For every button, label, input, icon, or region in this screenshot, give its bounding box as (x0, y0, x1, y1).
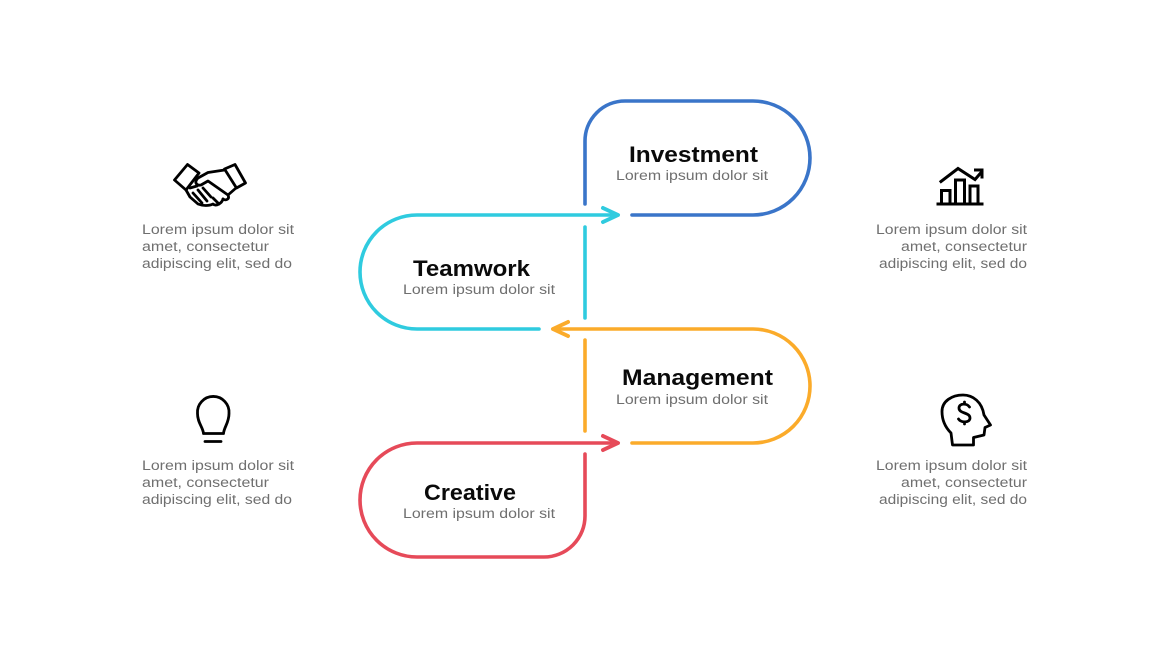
creative outline (360, 443, 617, 557)
creative heading: Creative (424, 480, 516, 505)
icon: head with dollar sign (942, 395, 990, 445)
icon: handshake (174, 164, 246, 206)
text block: bottom left: Lorem ipsum dolor sit (142, 458, 294, 473)
text block: bottom left (142, 458, 294, 507)
icon: light bulb (197, 396, 229, 442)
management heading: Management (622, 365, 774, 390)
investment subtitle: Lorem ipsum dolor sit (616, 168, 768, 183)
management subtitle: Lorem ipsum dolor sit (616, 392, 768, 407)
text block: bottom right: amet, consectetur (901, 475, 1028, 490)
text block: bottom right (876, 458, 1028, 507)
management arrow head (553, 322, 568, 336)
text block: bottom left: amet, consectetur (142, 475, 270, 490)
text block: top right: adipiscing elit, sed do (879, 256, 1027, 271)
teamwork arrow head (603, 208, 618, 222)
panel: investment loop (585, 101, 810, 215)
text block: top left (142, 222, 294, 271)
text block: top right: amet, consectetur (901, 239, 1028, 254)
text block: top right: Lorem ipsum dolor sit (876, 222, 1027, 237)
creative subtitle: Lorem ipsum dolor sit (403, 506, 555, 521)
text block: bottom right: Lorem ipsum dolor sit (876, 458, 1027, 473)
teamwork subtitle: Lorem ipsum dolor sit (403, 282, 555, 297)
text block: bottom left: adipiscing elit, sed do (142, 492, 292, 507)
investment outline (585, 101, 810, 215)
text block: top left: adipiscing elit, sed do (142, 256, 292, 271)
management outline (553, 329, 810, 443)
text block: bottom right: adipiscing elit, sed do (879, 492, 1027, 507)
teamwork heading: Teamwork (413, 256, 531, 281)
panel: teamwork loop (360, 208, 618, 329)
panel: management loop (553, 322, 810, 443)
panel: creative loop (360, 436, 618, 557)
text block: top left: amet, consectetur (142, 239, 270, 254)
icon: growth chart (938, 168, 982, 204)
text block: top right (876, 222, 1028, 271)
creative arrow head (603, 436, 618, 450)
management connector (583, 340, 587, 431)
investment heading: Investment (629, 142, 759, 167)
teamwork connector (583, 227, 587, 318)
teamwork outline (360, 215, 617, 329)
text block: top left: Lorem ipsum dolor sit (142, 222, 294, 237)
